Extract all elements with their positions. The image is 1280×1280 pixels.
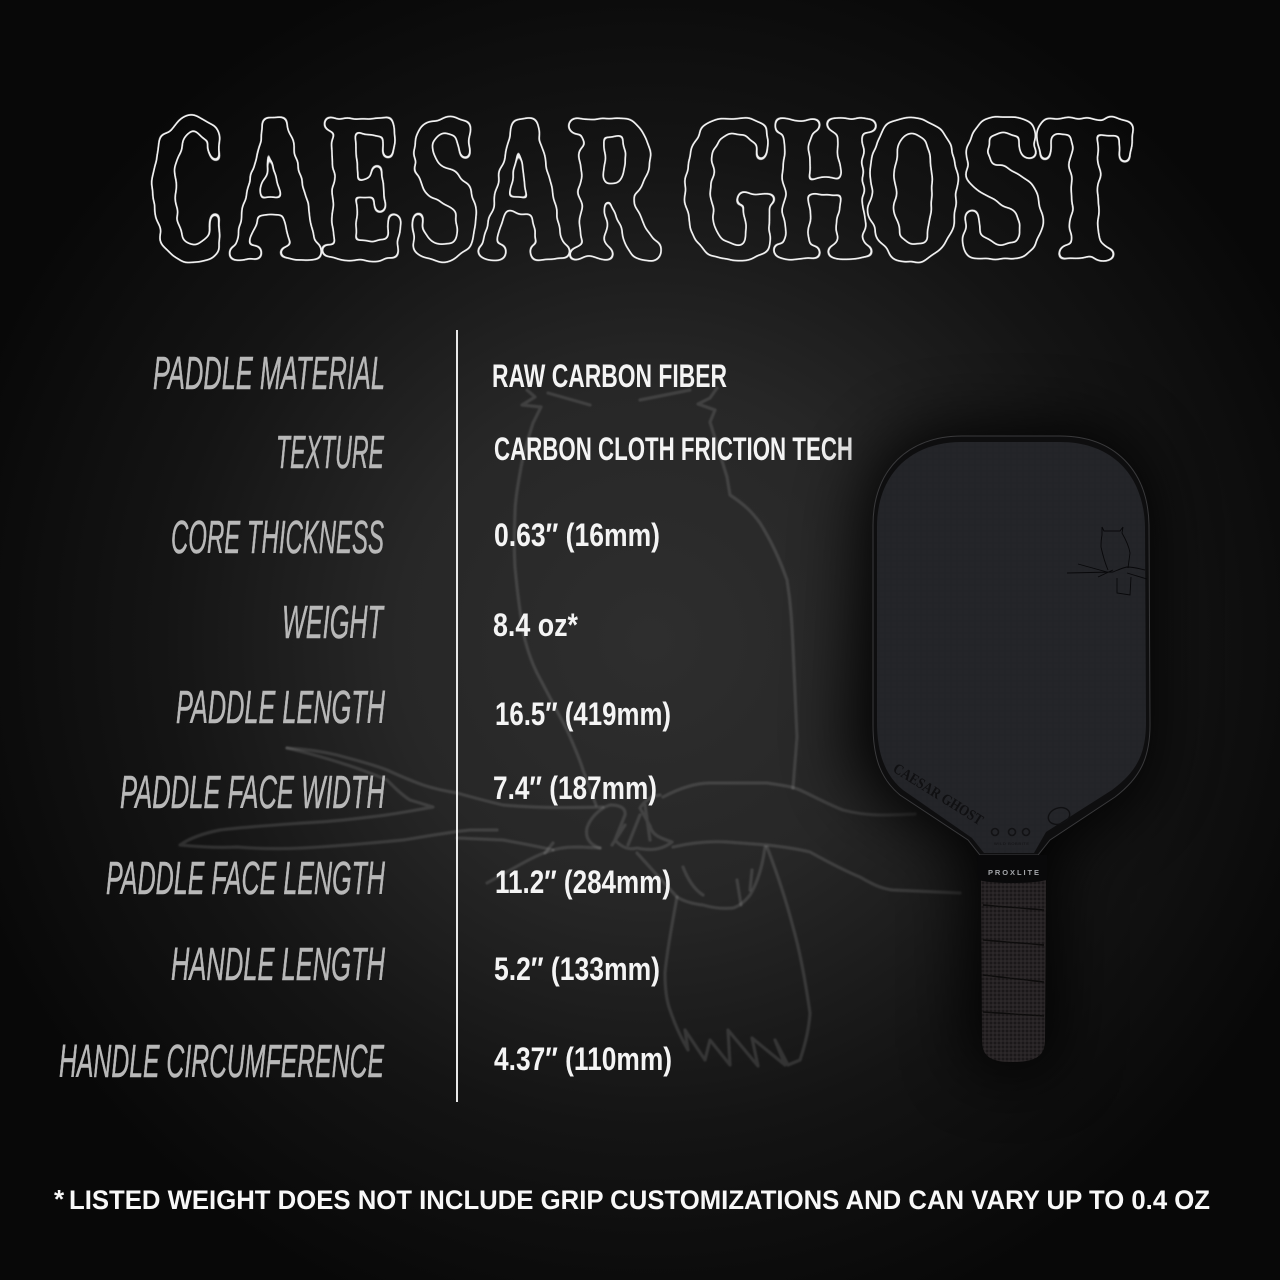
title: C: [151, 72, 225, 301]
paddle handle grip: [981, 880, 1046, 1062]
title: A: [479, 72, 569, 301]
paddle edge guard: [873, 436, 1150, 855]
title: G: [682, 72, 778, 301]
paddle throat collar: [977, 855, 1047, 883]
spec labels: WEIGHT: [282, 596, 385, 648]
title: S: [959, 72, 1046, 301]
spec labels: [59, 347, 385, 1087]
title: T: [1039, 72, 1131, 301]
title: S: [410, 72, 478, 301]
small print on face: WILD BOBBITE: [994, 841, 1029, 846]
title: E: [324, 72, 402, 301]
title: H: [774, 72, 874, 301]
title: R: [571, 72, 660, 301]
spec values: 8.4 oz*: [493, 607, 578, 643]
spec labels: PADDLE FACE WIDTH: [120, 766, 385, 818]
spec labels: HANDLE CIRCUMFERENCE: [59, 1035, 385, 1087]
spec labels: PADDLE LENGTH: [176, 681, 385, 733]
title: A: [231, 72, 321, 301]
skull marks on face: [992, 828, 1030, 836]
spec values: 7.4″ (187mm): [493, 770, 657, 806]
paddle name on face: CAESAR GHOST: [890, 761, 986, 829]
column divider: [456, 330, 458, 1102]
spec labels: PADDLE MATERIAL: [153, 347, 385, 399]
spec values: 0.63″ (16mm): [494, 517, 660, 553]
title: O: [866, 72, 960, 301]
paddle: [873, 436, 1150, 1062]
spec values: CARBON CLOTH FRICTION TECH: [494, 431, 853, 467]
spec labels: TEXTURE: [276, 426, 385, 478]
spec values: 5.2″ (133mm): [494, 951, 660, 987]
paddle shadow: [850, 428, 1150, 1070]
spec values: [492, 358, 853, 1077]
title: [151, 72, 1131, 301]
footnote: *: [54, 1184, 65, 1214]
paddle carbon face: [877, 442, 1146, 853]
spec labels: CORE THICKNESS: [171, 511, 384, 563]
spec values: 16.5″ (419mm): [495, 696, 671, 732]
spec values: 11.2″ (284mm): [495, 864, 671, 900]
oval logo on face: [1046, 805, 1072, 827]
brand text on collar: PROXLITE: [988, 868, 1039, 877]
spec values: RAW CARBON FIBER: [492, 358, 727, 394]
spec labels: HANDLE LENGTH: [171, 938, 385, 990]
footnote: LISTED WEIGHT DOES NOT INCLUDE GRIP CUSTOMIZATIONS AND CAN VARY UP TO 0.4 OZ: [69, 1185, 1210, 1215]
grip wrap bands: [983, 905, 1044, 1016]
owl illustration watermark: [180, 388, 960, 1066]
spec values: 4.37″ (110mm): [494, 1041, 672, 1077]
spec labels: PADDLE FACE LENGTH: [106, 852, 385, 904]
small owl mark on face: [1067, 527, 1147, 595]
